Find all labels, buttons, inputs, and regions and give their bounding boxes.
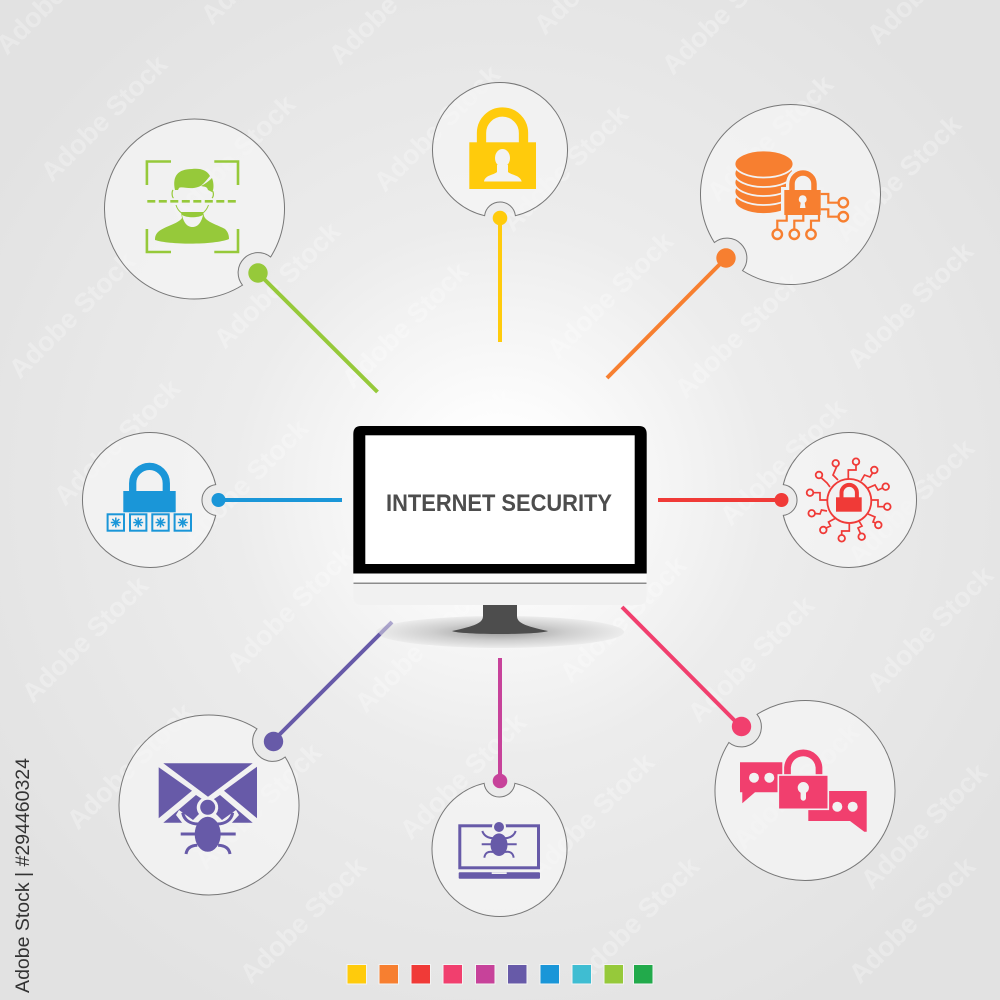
icon: face scan <box>147 162 238 252</box>
icon: mail bug <box>159 763 257 854</box>
watermark: Adobe Stock <box>208 216 347 354</box>
watermark: Adobe Stock <box>221 540 360 678</box>
bug halo <box>176 797 239 852</box>
watermark: Adobe Stock <box>163 89 302 227</box>
monitor stand <box>452 605 548 634</box>
dot: blue <box>212 493 226 507</box>
watermark: Adobe Stock <box>669 266 808 404</box>
nodes <box>807 458 891 542</box>
connector: orange <box>607 67 918 378</box>
dot: magenta <box>493 774 507 788</box>
lock body <box>836 497 862 512</box>
bubble: magenta <box>432 783 567 917</box>
bug body <box>195 817 221 852</box>
connector fade <box>380 622 392 634</box>
dot: red <box>774 493 788 507</box>
neck <box>182 215 203 227</box>
watermark: Adobe Stock <box>829 109 968 247</box>
monitor screen <box>365 435 635 564</box>
watermark: Adobe Stock <box>843 851 982 989</box>
bubble: orange <box>665 67 918 320</box>
colour palette <box>347 964 653 984</box>
circuit nodes <box>773 198 848 239</box>
bubble: blue <box>82 432 216 568</box>
traces <box>813 465 884 535</box>
connector: purple <box>82 622 392 932</box>
bubble: yellow <box>432 82 568 216</box>
watermark: Adobe Stock <box>522 747 661 885</box>
hair <box>174 169 210 190</box>
envelope right <box>224 767 257 818</box>
stock credit: Adobe Stock | #294460324 <box>12 758 34 993</box>
lock halo <box>781 167 824 218</box>
monitor chin <box>354 573 646 605</box>
circuit <box>777 194 838 229</box>
envelope bottom <box>163 795 253 823</box>
icon: network lock <box>807 458 891 542</box>
watermark: Adobe Stock <box>496 99 635 237</box>
watermark: Adobe Stock <box>861 560 1000 698</box>
dot: purple <box>264 732 283 751</box>
watermark: Adobe Stock <box>35 49 174 187</box>
connector: green <box>67 82 378 392</box>
bug body <box>490 833 508 856</box>
watermark: Adobe Stock <box>701 69 840 207</box>
dot: pink <box>732 717 751 736</box>
key box 4 <box>175 514 191 531</box>
dot: yellow <box>493 211 507 225</box>
watermark: Adobe Stock <box>189 737 328 875</box>
monitor shadow <box>376 616 624 648</box>
icon: laptop bug <box>459 820 540 879</box>
connector: magenta <box>432 658 567 917</box>
watermark: Adobe Stock <box>3 246 142 384</box>
chin line <box>354 582 646 584</box>
watermark: Adobe Stock <box>567 851 706 989</box>
watermark: Adobe Stock <box>349 580 488 718</box>
lock body <box>784 190 821 215</box>
bug head <box>494 822 504 832</box>
icon: password lock <box>108 466 191 531</box>
connector: red <box>658 432 917 568</box>
icon: database lock <box>734 150 848 239</box>
watermark: Adobe Stock <box>48 373 187 511</box>
base notch <box>492 872 507 874</box>
chin <box>176 205 208 216</box>
watermark: Adobe Stock <box>855 757 994 895</box>
monitor frame <box>353 426 647 574</box>
bubble: red <box>783 432 917 568</box>
right bubble <box>808 791 867 832</box>
person head <box>495 149 510 167</box>
monitor <box>353 426 647 648</box>
watermark: Adobe Stock <box>381 383 520 521</box>
bug head <box>200 800 215 815</box>
watermark: Adobe Stock <box>368 59 507 197</box>
scan line <box>147 200 237 203</box>
watermark: Adobe Stock <box>727 717 866 855</box>
right dots <box>832 802 858 812</box>
watermark: Adobe Stock <box>176 413 315 551</box>
connector: pink <box>622 607 932 918</box>
body <box>155 212 229 244</box>
icon: chat lock <box>740 753 867 832</box>
envelope left <box>159 767 192 818</box>
watermark: Adobe Stock <box>682 590 821 728</box>
connector: blue <box>82 432 342 568</box>
key box 1 <box>108 514 124 531</box>
lock shackle <box>842 485 857 498</box>
watermark: Adobe Stock <box>841 236 980 374</box>
lock shackle <box>788 753 819 776</box>
bug halo <box>492 820 506 834</box>
bubble: green <box>67 82 320 335</box>
watermark: Adobe Stock <box>16 570 155 708</box>
watermark: Adobe Stock <box>336 256 475 394</box>
watermark: Adobe Stock <box>842 433 981 571</box>
person shoulders <box>484 165 522 182</box>
lock body <box>123 491 176 512</box>
watermark: Adobe Stock <box>61 697 200 835</box>
icon: user lock <box>469 112 536 189</box>
lock shackle <box>792 173 814 191</box>
monitor title: INTERNET SECURITY <box>386 490 612 517</box>
key box 2 <box>130 514 146 531</box>
keyhole <box>798 782 809 801</box>
lock body <box>778 775 828 809</box>
watermark: Adobe Stock <box>554 550 693 688</box>
bubble: pink <box>679 665 932 918</box>
bug legs <box>482 831 517 858</box>
dot: green <box>248 263 268 283</box>
lock body <box>469 142 536 189</box>
dot: orange <box>716 248 736 268</box>
left dots <box>749 773 774 783</box>
ears <box>172 190 213 198</box>
watermark: Adobe Stock <box>541 226 680 364</box>
watermark: Adobe Stock <box>714 393 853 531</box>
watermark: Adobe Stock <box>394 707 533 845</box>
hair right <box>201 178 214 192</box>
watermark: Adobe Stock <box>509 423 648 561</box>
connector: yellow <box>432 82 568 342</box>
watermark: Adobe Stock <box>234 851 373 989</box>
bug legs <box>181 813 236 854</box>
laptop base <box>459 872 540 879</box>
keyhole <box>799 195 807 208</box>
bubble: purple <box>82 679 335 932</box>
chin highlight <box>354 573 646 583</box>
key box 3 <box>152 514 169 531</box>
